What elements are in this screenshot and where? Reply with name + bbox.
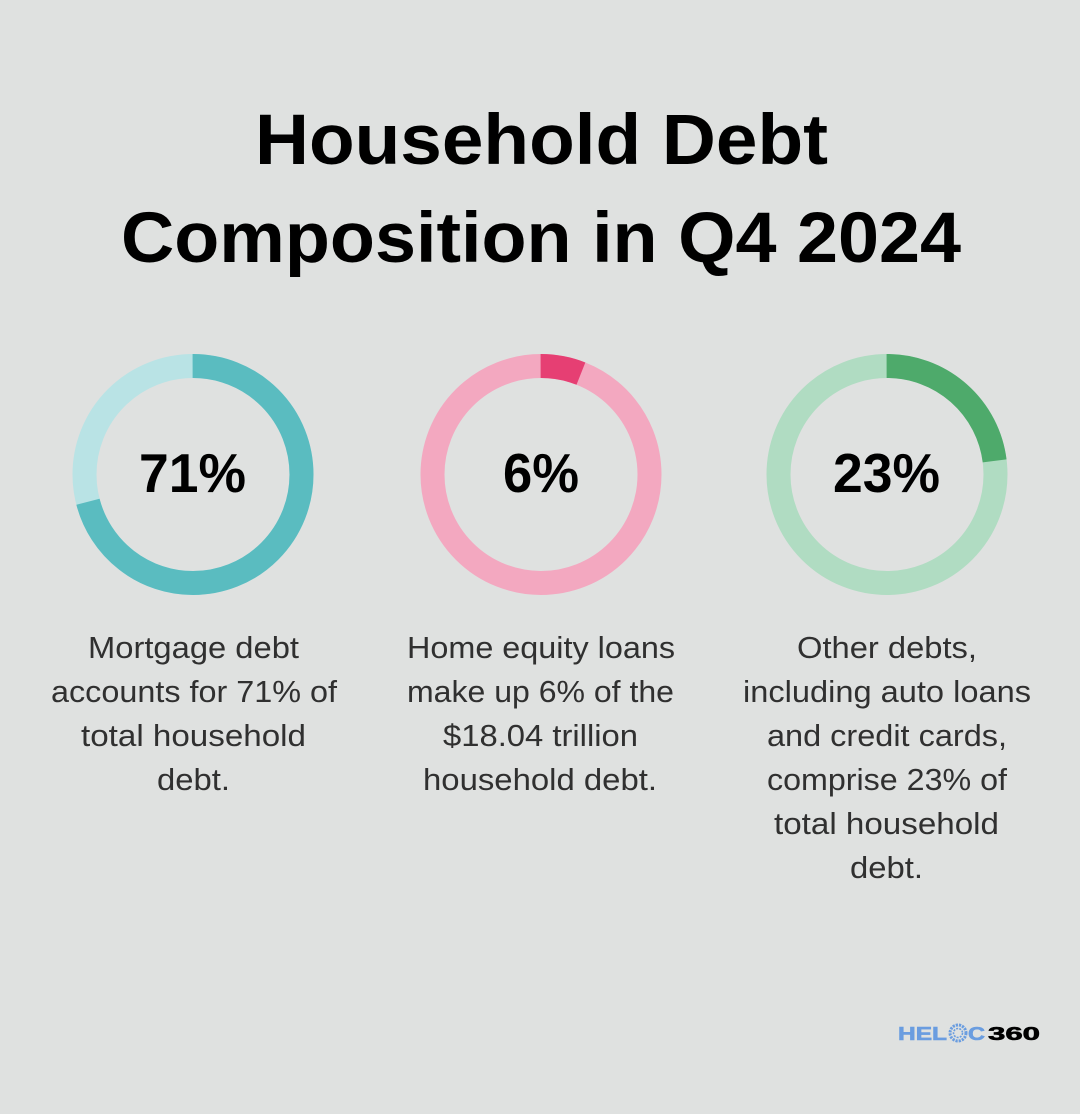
- description: mortgage debt: Mortgage debt: [88, 630, 299, 665]
- panel: other debts: [743, 366, 1031, 885]
- value: 71%: 71%: [139, 442, 246, 504]
- donut chart: 71%: [84, 366, 302, 583]
- icon: swirl letter O: [950, 1025, 966, 1041]
- description: mortgage debt: [51, 630, 337, 797]
- value: 6%: 6%: [503, 442, 579, 504]
- logo: HELOC360: 360: [988, 1024, 1040, 1044]
- donut chart: 6%: [432, 366, 650, 583]
- description: other debts: total household: [774, 806, 999, 841]
- title: Household Debt: [255, 101, 828, 180]
- description: home equity loans: make up 6% of the: [407, 674, 674, 709]
- logo: HELOC360: HEL: [898, 1024, 947, 1044]
- description: mortgage debt: total household: [81, 718, 306, 753]
- title: Composition in Q4 2024: [121, 199, 962, 278]
- value: 23%: 23%: [833, 442, 940, 504]
- description: other debts: and credit cards,: [767, 718, 1007, 753]
- description: other debts: Other debts,: [797, 630, 977, 665]
- description: other debts: comprise 23% of: [767, 762, 1007, 797]
- panel: home equity loans: [407, 366, 675, 797]
- description: other debts: [743, 630, 1031, 885]
- title: [121, 101, 962, 278]
- panel: mortgage debt: [51, 366, 337, 797]
- description: other debts: including auto loans: [743, 674, 1031, 709]
- donut chart: 23%: [778, 366, 996, 583]
- description: home equity loans: household debt.: [423, 762, 657, 797]
- logo: HELOC360: [898, 1024, 1040, 1044]
- description: home equity loans: [407, 630, 675, 797]
- logo: HELOC360: C: [968, 1024, 985, 1044]
- description: other debts: debt.: [850, 850, 923, 885]
- description: mortgage debt: accounts for 71% of: [51, 674, 337, 709]
- description: home equity loans: Home equity loans: [407, 630, 675, 665]
- description: mortgage debt: debt.: [157, 762, 230, 797]
- description: home equity loans: $18.04 trillion: [443, 718, 638, 753]
